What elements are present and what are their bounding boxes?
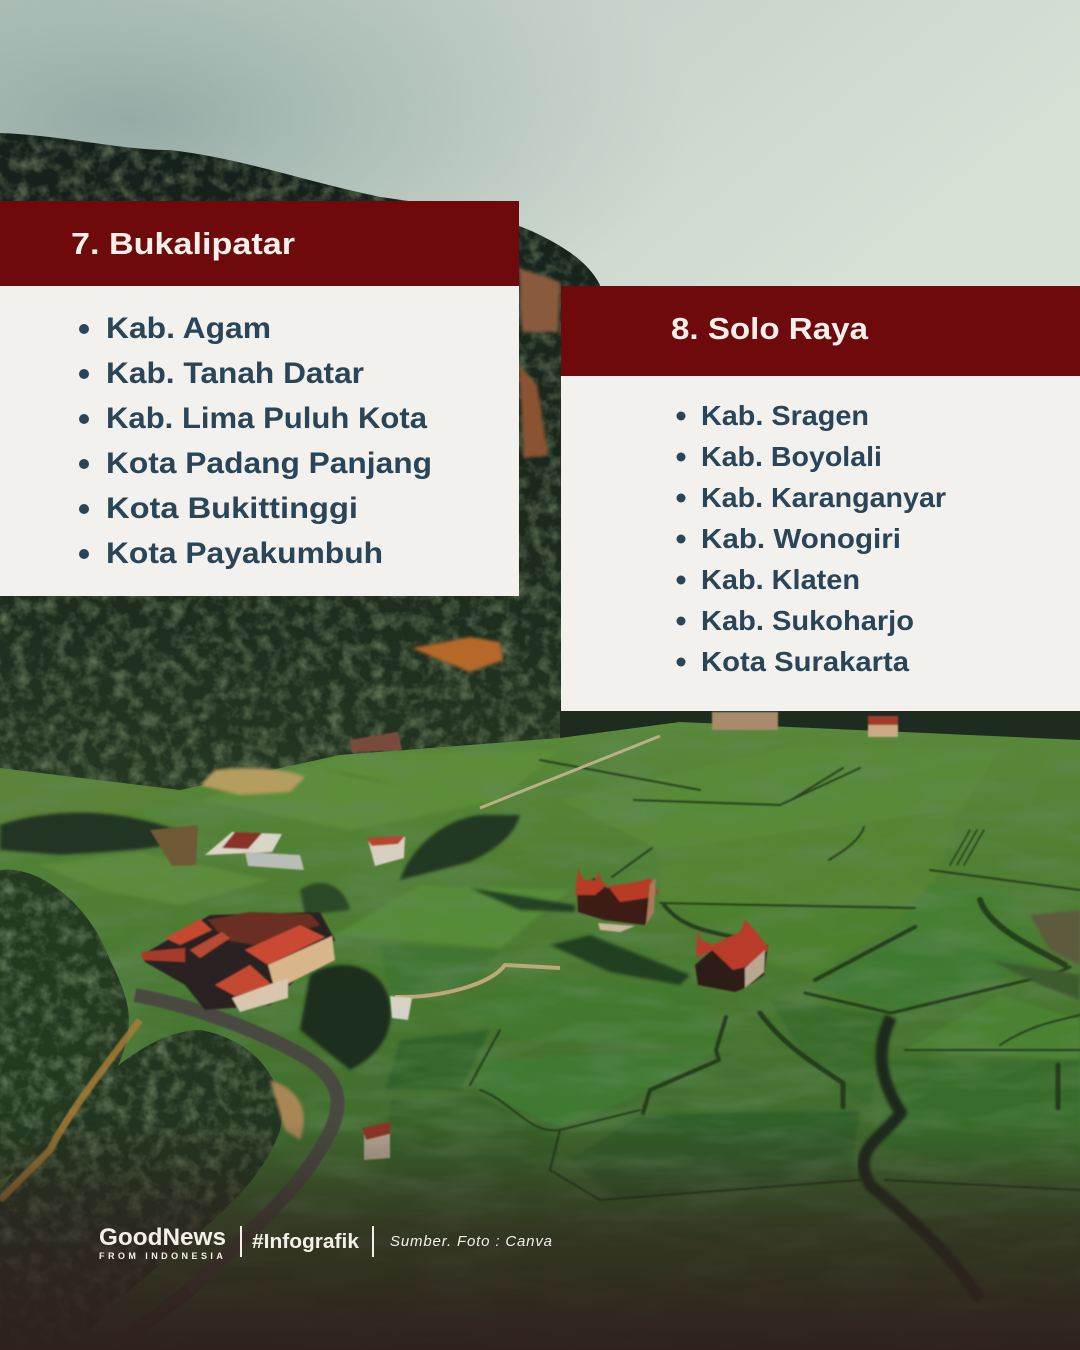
panel: Bukalipatar — [0, 201, 519, 596]
background photo: sky — [0, 0, 1080, 300]
tree clusters and road — [0, 768, 520, 1350]
list: Bukalipatar regions: Kota Padang Panjang — [106, 447, 432, 480]
village houses — [150, 712, 898, 1160]
panel header — [561, 286, 1080, 376]
background photo: forested hill — [0, 130, 1080, 810]
background photo: rice fields — [0, 720, 1080, 1350]
list: Solo Raya regions: Kab. Sragen — [701, 400, 869, 431]
panel: Solo Raya — [561, 286, 1080, 711]
logo: GoodNews from Indonesia: FROM INDONESIA — [99, 1251, 226, 1261]
list: Solo Raya regions: Kota Surakarta — [701, 646, 909, 677]
heading: 7. Bukalipatar: 7. Bukalipatar — [71, 226, 295, 261]
list: Bukalipatar regions: Kota Bukittinggi — [106, 492, 358, 525]
list: Solo Raya regions: Kab. Sukoharjo — [701, 605, 914, 636]
field dykes — [470, 760, 1080, 1200]
panel body — [0, 286, 519, 596]
list: Bukalipatar regions: Kab. Agam — [106, 312, 271, 345]
traditional Minangkabau houses — [575, 868, 769, 992]
logo: GoodNews from Indonesia: GoodNews — [99, 1224, 226, 1251]
list: Solo Raya regions: Kab. Wonogiri — [701, 523, 901, 554]
panel header — [0, 201, 519, 286]
list: Bukalipatar regions — [79, 312, 432, 570]
list: Bukalipatar regions: Kab. Tanah Datar — [106, 357, 364, 390]
list: Solo Raya regions: Kab. Karanganyar — [701, 482, 946, 513]
heading: 8. Solo Raya: 8. Solo Raya — [671, 311, 869, 346]
panel body — [561, 376, 1080, 711]
footer credits — [99, 1224, 552, 1261]
list: Solo Raya regions: Kab. Boyolali — [701, 441, 882, 472]
list: Bukalipatar regions: Kota Payakumbuh — [106, 537, 383, 570]
dark fade at bottom — [0, 1120, 1080, 1350]
field shadows — [320, 768, 690, 985]
hashtag label: #Infografik — [252, 1231, 360, 1253]
field path — [395, 965, 560, 997]
list: Solo Raya regions: Kab. Klaten — [701, 564, 860, 595]
red-roofed compound — [141, 912, 335, 1012]
list: Solo Raya regions — [676, 400, 946, 677]
source credit: Sumber. Foto : Canva — [390, 1233, 552, 1250]
list: Bukalipatar regions: Kab. Lima Puluh Kota — [106, 402, 427, 435]
